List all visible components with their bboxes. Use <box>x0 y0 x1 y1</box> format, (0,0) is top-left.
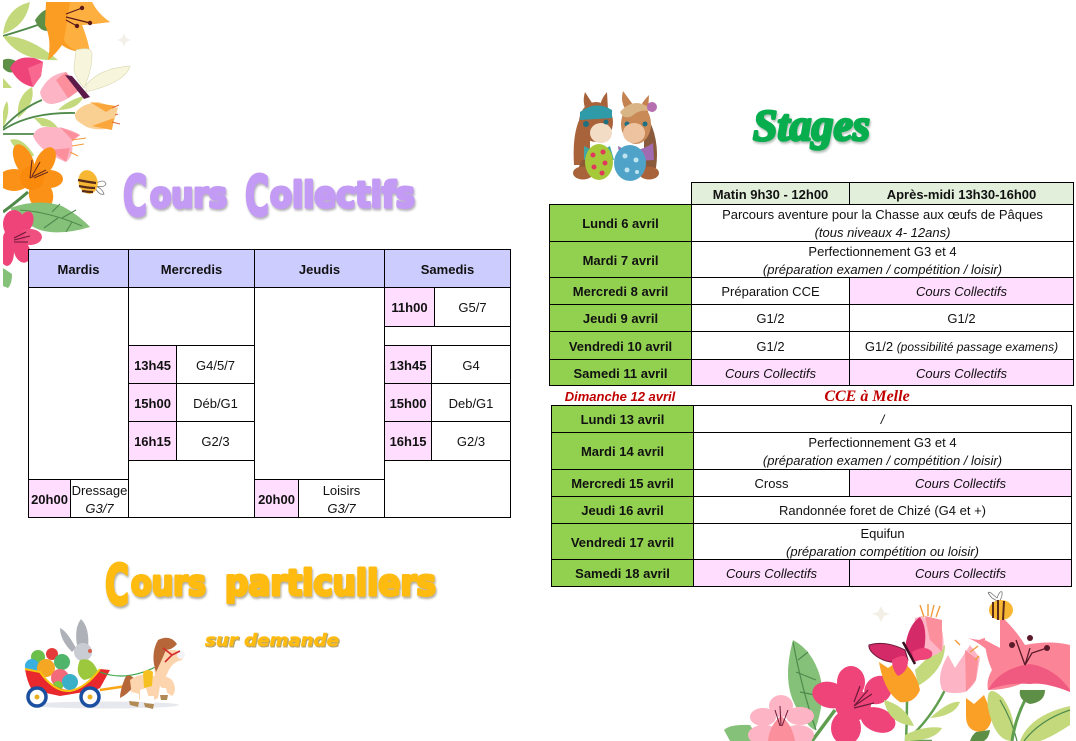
activity: G1/2 morning <box>691 304 850 332</box>
table: stages week 2 <box>551 405 1072 587</box>
activity: G1/2 Friday afternoon: G1/2 (possibilité passage examens) <box>865 338 1058 354</box>
group: Deb/G1: Deb/G1 <box>449 396 493 410</box>
activity: Equifun <box>693 523 1072 560</box>
group: Déb/G1 <box>176 383 255 422</box>
activity: G1/2 morning: G1/2 <box>756 311 785 326</box>
day: Lundi 6 avril <box>549 204 692 242</box>
heading: Cours particuliers: particuliers <box>225 563 436 604</box>
time: Samedi 11h00: 11h00 <box>391 300 428 315</box>
day: Mardi 7 avril <box>549 241 692 278</box>
day: Lundi 13 avril: Lundi 13 avril <box>581 412 664 427</box>
heading: Cours Collectifs: ours <box>150 176 227 216</box>
time: Mercredi 13h45: 13h45 <box>134 358 171 372</box>
day: Mardi 7 avril: Mardi 7 avril <box>583 252 658 268</box>
time: Samedi 16h15 <box>384 421 432 461</box>
day: Mardi 14 avril <box>551 432 694 470</box>
activity: Cours Collectifs afternoon <box>849 559 1072 587</box>
header: Samedis: Samedis <box>421 262 474 276</box>
time: Mardi 20h00: 20h00 <box>31 492 68 506</box>
activity: Randonnée: Randonnée foret de Chizé (G4 et +) <box>779 503 986 518</box>
activity: Cours Collectifs afternoon: Cours Collectifs <box>916 366 1007 380</box>
time: Mercredi 16h15: 16h15 <box>134 434 171 449</box>
group: G2/3 <box>176 421 255 461</box>
icon: bee <box>76 168 106 196</box>
header: Après-midi <box>849 182 1074 205</box>
heading: Cours Collectifs: ollectifs <box>270 175 415 216</box>
activity: Cours Collectifs morning: Cours Collectifs <box>726 566 817 581</box>
header: Matin <box>691 182 850 205</box>
activity: Préparation CCE <box>691 277 850 305</box>
activity: G1/2 afternoon: G1/2 <box>947 311 976 326</box>
header: Mardis <box>28 249 129 288</box>
activity: Perfectionnement: (préparation examen / compétition / loisir) <box>763 453 1002 468</box>
activity: Cross <box>693 469 850 497</box>
day: Samedi 18 avril <box>551 559 694 587</box>
group: G5/7 <box>434 287 511 327</box>
activity: Cross: Cross <box>755 476 788 491</box>
day: Samedi 11 avril: Samedi 11 avril <box>574 366 667 380</box>
heading: Cours particuliers: ours <box>131 564 206 604</box>
group: Loisirs: G3/7 <box>327 500 356 516</box>
time: Mercredi 15h00: 15h00 <box>134 396 171 410</box>
activity: Cours Collectifs afternoon: Cours Collectifs <box>915 566 1006 581</box>
day: Mercredi 15 avril: Mercredi 15 avril <box>571 476 674 491</box>
group: Déb/G1: Déb/G1 <box>193 396 238 410</box>
group: G5/7: G5/7 <box>458 300 487 315</box>
group: G4 <box>431 345 511 384</box>
group: G2/3: G2/3 <box>201 434 230 449</box>
day: Vendredi 10 avril <box>549 331 692 360</box>
day: Jeudi 16 avril <box>551 496 694 524</box>
time: Mercredi 16h15 <box>128 421 177 461</box>
day: Mercredi 8 avril: Mercredi 8 avril <box>573 284 668 299</box>
illustration: top-left flowers <box>3 2 130 288</box>
activity: G1/2 Friday morning <box>691 331 850 360</box>
activity: Equifun: (préparation compétition ou loisir) <box>786 544 979 558</box>
day: Lundi 6 avril: Lundi 6 avril <box>582 216 659 231</box>
heading: Cours particuliers: C <box>105 553 129 617</box>
activity: Cours Collectifs morning: Cours Collectifs <box>725 366 816 380</box>
time: Samedi 13h45 <box>384 345 432 384</box>
activity: Perfectionnement <box>691 241 1074 278</box>
activity: Parcours aventure <box>691 204 1074 242</box>
activity: Perfectionnement <box>693 432 1072 470</box>
activity: Cours Collectifs afternoon <box>849 359 1074 386</box>
group: G4/5/7 <box>176 345 255 384</box>
header: Mercredis: Mercredis <box>161 262 222 276</box>
day: Mercredi 8 avril <box>549 277 692 305</box>
illustration: two horses with Easter eggs <box>573 91 659 181</box>
header: Mardis: Mardis <box>58 262 99 276</box>
activity: Perfectionnement: (préparation examen / compétition / loisir) <box>763 262 1002 276</box>
icon: butterfly <box>869 617 932 676</box>
group: Loisirs <box>298 479 385 518</box>
note: Dimanche 12 avril: Dimanche 12 avril <box>565 389 675 404</box>
group: G4/5/7: G4/5/7 <box>196 358 235 372</box>
subheading: sur demande: sur demande <box>206 632 340 652</box>
group: Loisirs: Loisirs <box>323 482 360 498</box>
activity: Perfectionnement: Perfectionnement G3 et 4 <box>808 435 957 450</box>
group: Samedi G2/3: G2/3 <box>457 434 485 449</box>
header: Matin: Matin 9h30 - 12h00 <box>713 186 828 202</box>
heading: Cours particuliers <box>105 553 438 617</box>
day: Mardi 14 avril: Mardi 14 avril <box>581 444 664 459</box>
note: CCE à Melle: CCE à Melle <box>824 388 910 405</box>
heading: Cours Collectifs <box>123 164 417 228</box>
time: Samedi 15h00: 15h00 <box>390 396 426 410</box>
activity: G1/2 afternoon <box>849 304 1074 332</box>
group: Dressage: Dressage <box>72 482 127 498</box>
heading: Cours Collectifs: C <box>123 164 147 228</box>
day: Jeudi 9 avril: Jeudi 9 avril <box>583 311 658 326</box>
activity: Cours Collectifs: Cours Collectifs <box>916 284 1007 299</box>
activity: Cours Collectifs morning <box>691 359 850 386</box>
time: Jeudi 20h00 <box>254 479 299 518</box>
activity: Cours Collectifs morning <box>693 559 850 587</box>
time: Mercredi 13h45 <box>128 345 177 384</box>
day: Vendredi 10 avril: Vendredi 10 avril <box>569 338 672 354</box>
activity: Parcours aventure: Parcours aventure pour la Chasse aux œufs de Pâques <box>722 207 1043 222</box>
icon: bee <box>988 592 1013 620</box>
group: Samedi G2/3 <box>431 421 511 461</box>
illustration: bottom-right flowers <box>724 591 1070 741</box>
day: Vendredi 17 avril <box>551 523 694 560</box>
day: Samedi 18 avril: Samedi 18 avril <box>575 566 670 581</box>
activity: Equifun: Equifun <box>860 526 905 540</box>
activity: Cours Collectifs <box>849 277 1074 305</box>
activity: Perfectionnement: Perfectionnement G3 et 4 <box>808 244 957 258</box>
day: Jeudi 9 avril <box>549 304 692 332</box>
header: Jeudis: Jeudis <box>299 262 340 276</box>
header: Jeudis <box>254 249 385 288</box>
time: Mercredi 15h00 <box>128 383 177 422</box>
time: Samedi 13h45: 13h45 <box>390 358 426 372</box>
subheading: sur demande: sur demande <box>205 631 339 651</box>
time: Mardi 20h00 <box>28 479 71 518</box>
activity: Cours Collectifs: Cours Collectifs <box>915 476 1006 491</box>
day: Lundi 13 avril <box>551 405 694 433</box>
header: Samedis <box>384 249 511 288</box>
illustration: Easter cart with bunny and pony <box>24 619 185 709</box>
day: Samedi 11 avril <box>549 359 692 386</box>
time: Samedi 15h00 <box>384 383 432 422</box>
time: Samedi 16h15: 16h15 <box>390 434 426 449</box>
header: Mercredis <box>128 249 255 288</box>
activity: Parcours aventure: (tous niveaux 4- 12ans) <box>815 225 950 240</box>
table: weekly group lessons <box>28 249 511 518</box>
heading: Stages: Stages <box>753 101 870 150</box>
group: Dressage: G3/7 <box>85 500 114 516</box>
group: Deb/G1 <box>431 383 511 422</box>
activity: Préparation CCE: Préparation CCE <box>721 284 820 299</box>
header: Après-midi: Après-midi 13h30-16h00 <box>887 186 1036 202</box>
activity: G1/2 Friday afternoon <box>849 331 1074 360</box>
time: Jeudi 20h00: 20h00 <box>258 492 295 506</box>
time: Samedi 11h00 <box>384 287 435 327</box>
table: stages week 1 <box>549 182 1074 386</box>
activity: Cours Collectifs <box>849 469 1072 497</box>
group: G4: G4 <box>462 358 480 372</box>
activity: none: / <box>881 412 884 427</box>
activity: none <box>693 405 1072 433</box>
group: Dressage <box>70 479 129 518</box>
activity: Randonnée <box>693 496 1072 524</box>
day: Vendredi 17 avril: Vendredi 17 avril <box>571 534 674 550</box>
day: Mercredi 15 avril <box>551 469 694 497</box>
day: Jeudi 16 avril: Jeudi 16 avril <box>581 503 664 518</box>
activity: G1/2 Friday morning: G1/2 <box>756 338 785 354</box>
heading: Cours Collectifs: C <box>245 164 269 228</box>
